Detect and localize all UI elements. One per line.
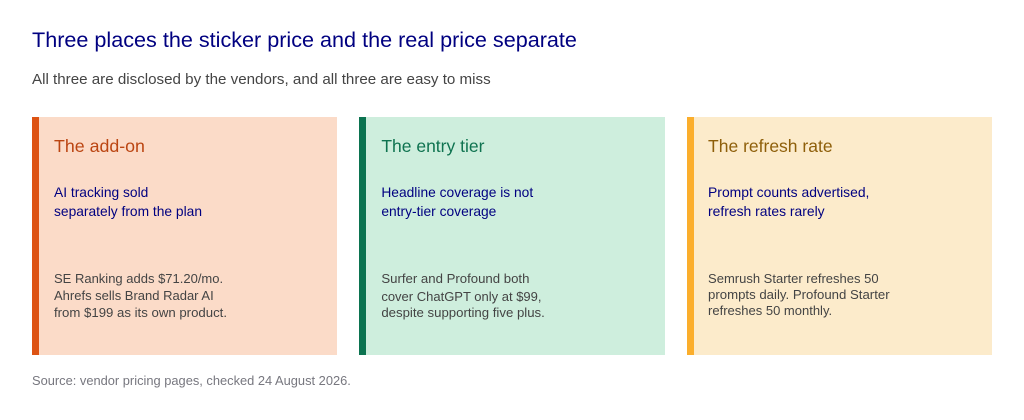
- panel: the entry tier: [359, 117, 665, 355]
- body text: entry tier: despite supporting five plus.: [381, 305, 545, 320]
- accent bar: orange: [32, 117, 39, 355]
- body text: add-on: [54, 271, 227, 320]
- panel: the refresh rate: [687, 117, 992, 355]
- body text: add-on: from $199 as its own product.: [54, 305, 227, 320]
- body text: add-on: SE Ranking adds $71.20/mo.: [54, 271, 223, 286]
- body text: add-on: Ahrefs sells Brand Radar AI: [54, 288, 214, 303]
- subheading: refresh rate: refresh rates rarely: [708, 203, 825, 219]
- subheading: refresh rate: [708, 184, 869, 219]
- body text: entry tier: Surfer and Profound both: [381, 271, 529, 286]
- body text: refresh rate: Semrush Starter refreshes 50: [708, 271, 879, 286]
- subheading: add-on: separately from the plan: [54, 204, 202, 219]
- subheading: entry tier: entry-tier coverage: [381, 204, 496, 219]
- source note: Source: vendor pricing pages, checked 24 August 2026.: [32, 373, 351, 388]
- body text: refresh rate: refreshes 50 monthly.: [708, 303, 832, 318]
- subheading: refresh rate: Prompt counts advertised,: [708, 184, 869, 200]
- body text: entry tier: [381, 271, 545, 320]
- accent bar: amber: [687, 117, 694, 355]
- heading: the refresh rate: The refresh rate: [708, 136, 833, 156]
- heading: the add-on: The add-on: [54, 136, 145, 156]
- subheading: add-on: AI tracking sold: [54, 185, 148, 200]
- body text: entry tier: cover ChatGPT only at $99,: [381, 289, 542, 304]
- subheading: entry tier: [381, 185, 534, 219]
- subtitle: All three are disclosed by the vendors, and all three are easy to miss: [32, 71, 491, 88]
- body text: refresh rate: [708, 271, 890, 318]
- panel: the add-on: [32, 117, 337, 355]
- body text: refresh rate: prompts daily. Profound Starter: [708, 287, 890, 302]
- accent bar: green: [359, 117, 366, 355]
- title: Three places the sticker price and the real price separate: [32, 27, 577, 52]
- heading: the entry tier: The entry tier: [381, 136, 484, 156]
- subheading: add-on: [54, 185, 202, 219]
- subheading: entry tier: Headline coverage is not: [381, 185, 533, 200]
